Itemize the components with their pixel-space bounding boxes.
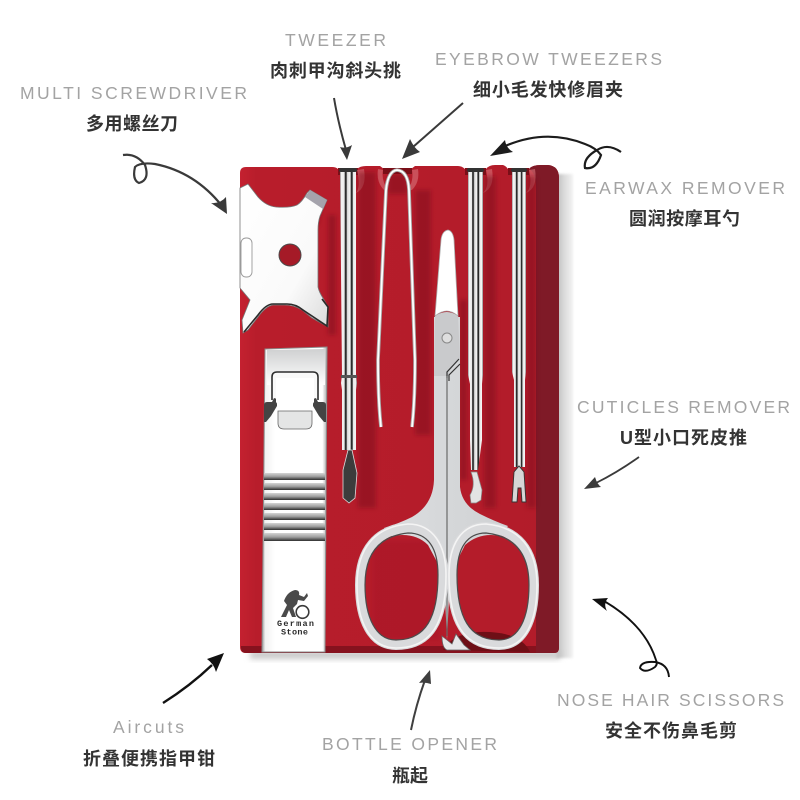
lever window [272, 372, 318, 400]
label: cuticles remover [577, 397, 790, 448]
flat tip [343, 450, 357, 503]
english name: MULTI SCREWDRIVER [20, 83, 247, 103]
cuticle pusher rod [339, 168, 357, 503]
left hinge wing [264, 398, 277, 422]
rod [340, 170, 357, 450]
product: red card with tools [240, 165, 573, 659]
nail clipper [262, 347, 327, 652]
rod head [511, 168, 527, 172]
chinese name: U型小口死皮推 [620, 428, 747, 448]
english name: Aircuts [113, 717, 184, 737]
notch interiors [338, 168, 529, 175]
tweezer arms [378, 170, 415, 427]
scissor blade lower [434, 312, 460, 376]
english name: EYEBROW TWEEZERS [435, 49, 662, 69]
slot [241, 238, 252, 277]
opener hook [442, 634, 470, 650]
right hinge wing [313, 398, 326, 422]
spoon [470, 472, 482, 503]
chinese name: 细小毛发快修眉夹 [473, 79, 623, 100]
logo wordmark: German [277, 619, 314, 629]
scissor shanks [384, 317, 508, 640]
red card body [240, 165, 559, 653]
rod [512, 170, 526, 467]
english name: TWEEZER [285, 30, 386, 50]
multi screwdriver [240, 184, 328, 333]
notch scoops [356, 169, 536, 193]
scissor blade upper [435, 230, 458, 316]
arrow: aircuts [163, 653, 224, 703]
logo: figure with wheel [281, 590, 309, 618]
forked tip [512, 466, 526, 502]
arrow: nose hair scissors [592, 598, 669, 677]
arrow: earwax remover [490, 137, 621, 168]
rod head [339, 168, 357, 172]
label: multi screwdriver [20, 83, 247, 134]
arrow: multi screwdriver [123, 155, 227, 214]
arrow: bottle opener [411, 670, 431, 730]
card bottom edge [241, 646, 536, 653]
chinese name: 安全不伤鼻毛剪 [605, 720, 737, 741]
left finger ring [357, 524, 446, 648]
lower reflection [244, 299, 328, 332]
right finger ring [449, 524, 537, 648]
arrow: eyebrow tweezers [402, 103, 463, 159]
arrow: tweezer [334, 98, 352, 160]
rod collar [341, 375, 357, 378]
grooves [264, 473, 325, 541]
pivot screw [442, 333, 452, 343]
english name: NOSE HAIR SCISSORS [557, 690, 784, 710]
grey tip facet [305, 190, 327, 209]
label: tweezer [270, 30, 401, 81]
earwax spoon rod [467, 168, 484, 503]
lower window [278, 411, 312, 429]
round hole [279, 244, 301, 266]
u-shaped remover rod [511, 168, 527, 502]
pivot stop detail [447, 359, 460, 381]
label: earwax remover [585, 178, 785, 229]
chinese name: 圆润按摩耳勺 [629, 208, 740, 229]
tweezer highlight [378, 170, 415, 427]
english name: CUTICLES REMOVER [577, 397, 790, 417]
card side shadow [556, 174, 573, 658]
nose hair scissors [357, 230, 537, 652]
logo wordmark second line: Stone [281, 628, 308, 638]
chinese name: 折叠便携指甲钳 [83, 748, 215, 769]
screwdriver plate [240, 184, 328, 333]
eyebrow tweezers [378, 170, 415, 427]
card bottom shadow [250, 651, 560, 659]
label: nose hair scissors [557, 690, 784, 741]
rod head [467, 168, 484, 172]
tool cast shadows [300, 172, 536, 640]
dark right band of card [529, 165, 559, 653]
label: bottle opener [322, 734, 497, 786]
chinese name: 多用螺丝刀 [86, 114, 178, 134]
chinese name: 瓶起 [392, 766, 428, 786]
clipper top shade [267, 349, 325, 385]
lever stem [276, 378, 314, 410]
rod [468, 170, 483, 470]
label: eyebrow tweezers [435, 49, 662, 100]
english name: EARWAX REMOVER [585, 178, 785, 198]
clipper body [262, 347, 327, 652]
blade seam [446, 376, 448, 636]
chinese name: 肉刺甲沟斜头挑 [270, 61, 401, 81]
arrow: cuticles remover [584, 457, 639, 489]
english name: BOTTLE OPENER [322, 734, 497, 754]
label: aircuts [83, 717, 215, 769]
bottle opener recess [443, 632, 530, 652]
